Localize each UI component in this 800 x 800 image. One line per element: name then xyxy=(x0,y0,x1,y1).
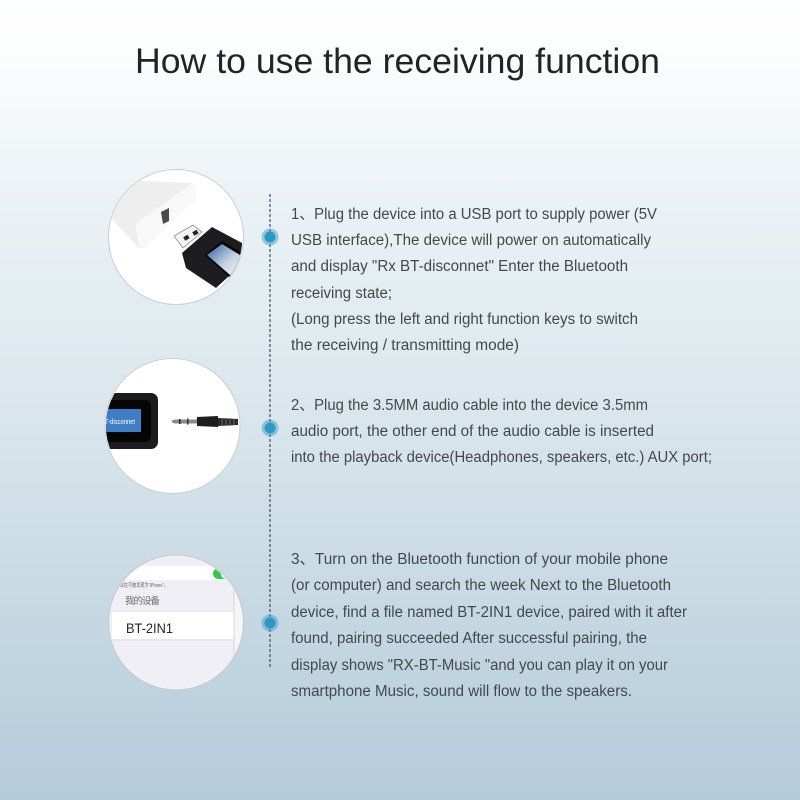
caption small: 现在可被发现为"iPhone"。 xyxy=(120,581,168,589)
step 3 text: found, pairing succeeded After successful pairing, the xyxy=(291,630,647,647)
step 1 text xyxy=(291,206,658,354)
step 2 image: device and audio cable xyxy=(90,358,240,494)
step 1 text: the receiving / transmitting mode) xyxy=(291,337,519,354)
step 1 text: USB interface),The device will power on automatically xyxy=(291,232,651,249)
step 1 text: 1、Plug the device into a USB port to supply power (5V xyxy=(291,206,658,223)
icon: device with screen xyxy=(106,393,158,449)
title: How to use the receiving function xyxy=(135,42,660,81)
phone edge xyxy=(234,590,235,656)
step 3 text: 3、Turn on the Bluetooth function of your mobile phone xyxy=(291,551,668,568)
step 3 marker xyxy=(262,614,278,632)
icon: 3.5mm audio jack xyxy=(172,416,238,427)
step 2 text xyxy=(291,397,712,466)
icon: white USB charger xyxy=(108,180,196,248)
step 1 text: receiving state; xyxy=(291,285,392,302)
step 2 text: 2、Plug the 3.5MM audio cable into the device 3.5mm xyxy=(291,397,648,414)
step 1 text: (Long press the left and right function keys to switch xyxy=(291,311,638,328)
section label: 我的设备 xyxy=(125,595,160,607)
icon: black USB receiver xyxy=(174,225,242,288)
step 3 image: phone Bluetooth list xyxy=(105,555,247,690)
timeline dashed line xyxy=(269,194,271,667)
step 3 text xyxy=(291,551,687,700)
device row: BT-2IN1 xyxy=(126,620,173,636)
step 3 text: display shows "RX-BT-Music "and you can play it on your xyxy=(291,657,668,674)
step 1 image: USB device and port xyxy=(108,170,244,304)
settings row with toggle xyxy=(125,566,227,580)
device row xyxy=(105,611,234,640)
step 2 marker xyxy=(262,420,278,436)
step 3 text: device, find a file named BT-2IN1 device, paired with it after xyxy=(291,604,687,621)
step 3 text: (or computer) and search the week Next to the Bluetooth xyxy=(291,577,671,594)
step 2 text: audio port, the other end of the audio cable is inserted xyxy=(291,423,654,440)
step 1 marker xyxy=(262,228,278,246)
step 2 text: into the playback device(Headphones, speakers, etc.) AUX port; xyxy=(291,449,712,466)
step 3 text: smartphone Music, sound will flow to the speakers. xyxy=(291,683,632,700)
icon: device with screen: T-disconnet xyxy=(105,419,135,426)
step 1 text: and display "Rx BT-disconnet" Enter the Bluetooth xyxy=(291,258,628,275)
